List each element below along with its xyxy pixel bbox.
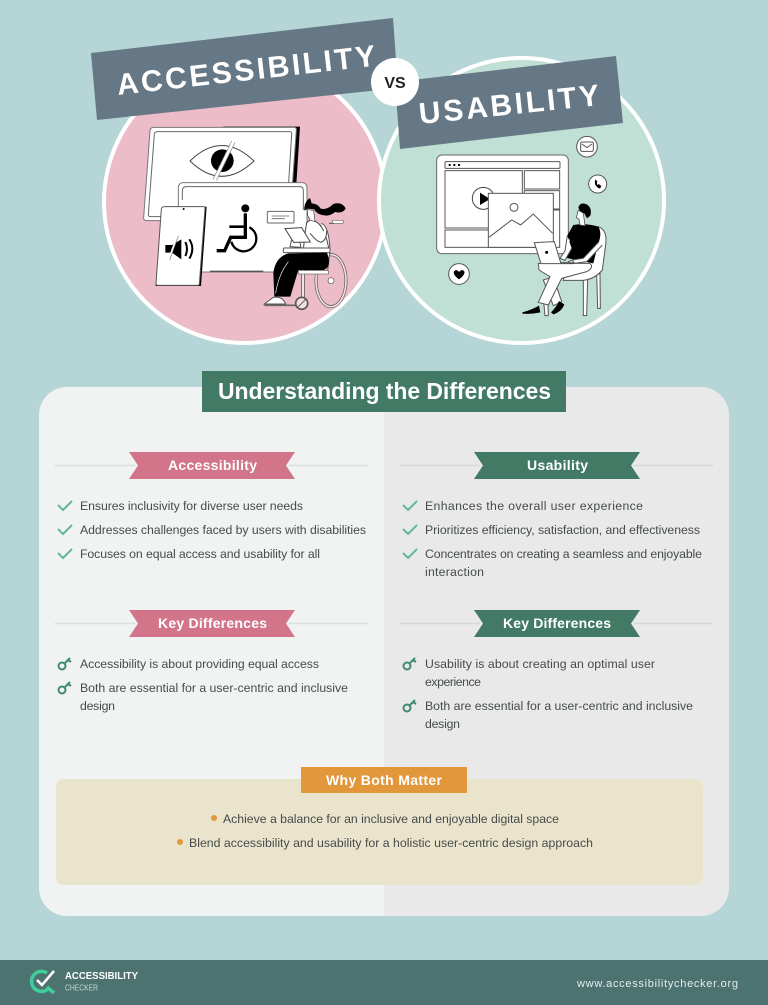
panel: comparison card <box>39 387 729 916</box>
website url: www.accessibilitychecker.org <box>576 978 738 990</box>
heading: understanding the differences: Understanding the Differences <box>218 378 551 404</box>
heading: understanding the differences <box>202 371 566 412</box>
badge: vs <box>371 58 419 106</box>
bullets: why both matter: Blend accessibility and usability for a holistic user-centric design approach <box>189 836 593 850</box>
list: accessibility points: Addresses challenges faced by users with disabilities <box>80 523 366 537</box>
panel: accessibility column <box>55 452 368 713</box>
list: accessibility points <box>58 499 366 561</box>
banner: usability: USABILITY <box>417 79 601 131</box>
heading: why both matter <box>301 767 467 793</box>
circle: accessibility <box>104 61 386 343</box>
logo text <box>65 971 138 992</box>
ribbon: accessibility: Accessibility <box>168 457 257 473</box>
banner: usability <box>395 56 623 149</box>
list: usability points: Prioritizes efficiency, satisfaction, and effectiveness <box>425 523 700 537</box>
list: key differences right: design <box>425 717 460 731</box>
list: key differences left: Accessibility is about providing equal access <box>80 657 319 671</box>
panel: usability column <box>400 452 713 731</box>
illustration: usability browser <box>437 136 607 284</box>
panel: hero header <box>91 18 664 343</box>
ribbon: key differences right: Key Differences <box>503 615 611 631</box>
list: key differences right <box>404 657 693 731</box>
list: key differences left <box>58 657 348 713</box>
banner: accessibility <box>91 18 398 120</box>
list: key differences right: Both are essential for a user-centric and inclusive <box>425 699 693 713</box>
list: accessibility points: Ensures inclusivity for diverse user needs <box>80 499 303 513</box>
list: usability points: Concentrates on creating a seamless and enjoyable <box>425 547 702 561</box>
bullets: why both matter: Achieve a balance for an inclusive and enjoyable digital space <box>223 812 559 826</box>
list: key differences left: Both are essential for a user-centric and inclusive <box>80 681 348 695</box>
logo text: ACCESSIBILITY <box>65 971 138 982</box>
banner: accessibility: ACCESSIBILITY <box>115 40 377 102</box>
list: usability points <box>403 499 702 579</box>
heading: why both matter: Why Both Matter <box>326 772 443 788</box>
ribbon: key differences left <box>129 610 295 637</box>
list: usability points: interaction <box>425 565 484 579</box>
callout: why both matter <box>56 767 703 885</box>
icon: accessibility checker logo <box>32 971 54 993</box>
ribbon: usability: Usability <box>527 457 588 473</box>
circle: usability <box>379 58 664 343</box>
illustration: wheelchair user <box>264 198 346 309</box>
ribbon: key differences left: Key Differences <box>158 615 267 631</box>
illustration: accessibility devices <box>144 127 307 286</box>
ribbon: key differences right <box>474 610 640 637</box>
badge: vs: VS <box>384 75 406 92</box>
ribbon: accessibility <box>129 452 295 479</box>
ribbon: usability <box>474 452 640 479</box>
list: key differences right: Usability is about creating an optimal user <box>425 657 655 671</box>
footer <box>0 960 768 1005</box>
illustration: laptop user on chair <box>522 204 606 316</box>
list: key differences right: experience <box>425 675 481 689</box>
logo text: CHECKER <box>65 984 98 992</box>
list: accessibility points: Focuses on equal access and usability for all <box>80 547 320 561</box>
list: usability points: Enhances the overall user experience <box>425 499 643 513</box>
list: key differences left: design <box>80 699 115 713</box>
bullets: why both matter <box>177 812 593 850</box>
